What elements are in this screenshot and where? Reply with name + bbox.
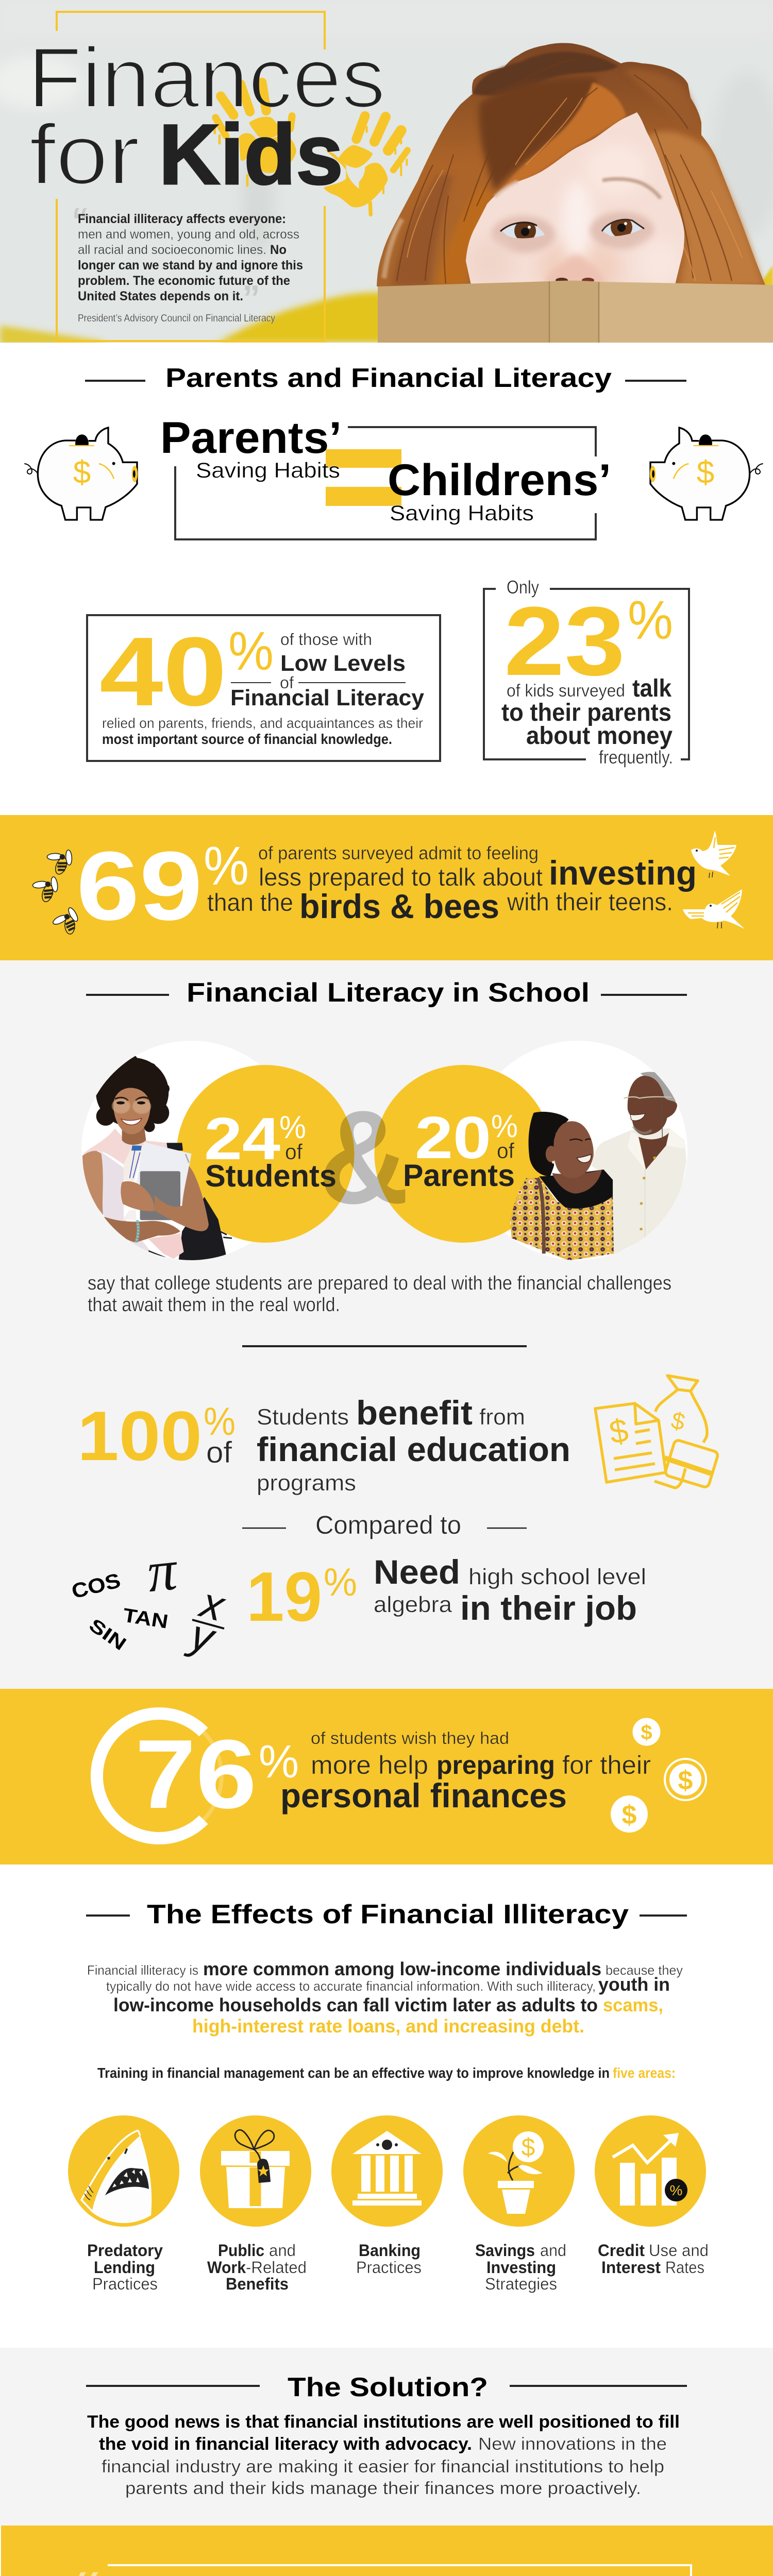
- stat: 69 percent: %: [204, 836, 249, 896]
- yellow circle: parents: [374, 1065, 552, 1243]
- white circle left: [81, 1041, 301, 1260]
- hero photo background: [0, 0, 773, 345]
- open book: [378, 281, 773, 343]
- banner text: with their teens.: [507, 889, 673, 916]
- stat: 20 percent of parents: %: [491, 1109, 518, 1144]
- hero quote: “: [72, 200, 90, 241]
- stat box: 23 percent: Only: [507, 577, 539, 598]
- stat: 19 percent: Need: [374, 1553, 460, 1591]
- label: predatory lending practices: Predatory: [87, 2241, 163, 2260]
- banner text: of parents surveyed admit to feeling: [258, 842, 539, 863]
- icon: plant: [463, 2115, 575, 2227]
- label: credit use and interest rates: Use and: [649, 2241, 709, 2260]
- hero quote: No: [270, 243, 287, 257]
- stat: 20 percent of parents: [403, 1104, 518, 1193]
- stat: 24 percent of students: 24: [204, 1105, 280, 1172]
- girl nose: [545, 255, 606, 284]
- hero quote: problem. The economic future of the: [78, 274, 290, 288]
- banner text: for their: [562, 1751, 651, 1780]
- label: savings and investing strategies: [475, 2241, 566, 2293]
- photo: student: [81, 1055, 232, 1261]
- paragraph: high-interest rate loans, and increasing debt.: [192, 2015, 584, 2037]
- stat: 19 percent: 19: [246, 1557, 322, 1636]
- quote text: [63, 2575, 711, 2576]
- girl eyebrow: [602, 179, 661, 198]
- icon: bees: [30, 846, 82, 939]
- girl right eye: [601, 218, 645, 236]
- stat: 76 percent: 76: [135, 1720, 257, 1829]
- caption: [88, 1273, 671, 1316]
- stat: 69 percent: 69: [76, 832, 203, 941]
- banner text: of students wish they had: [311, 1728, 509, 1748]
- paragraph: typically do not have wide access to accurate financial information. With such illiteracy,: [106, 1978, 596, 1994]
- title: for: [29, 107, 140, 202]
- saving habits equation: Childrens’: [388, 455, 611, 505]
- stat box: 23 percent: [484, 577, 689, 768]
- stat: 100 percent: financial education: [257, 1430, 570, 1468]
- hero quote: [72, 200, 303, 324]
- banner text: birds & bees: [299, 887, 499, 925]
- label: credit use and interest rates: Rates: [665, 2258, 704, 2277]
- stat: 76 percent: [135, 1720, 299, 1829]
- stat: 100 percent: from: [479, 1404, 525, 1430]
- icon: money bag, bill and cards: $: [607, 1411, 631, 1451]
- stat: 76 percent: %: [259, 1736, 299, 1788]
- stat: 19 percent: algebra: [374, 1592, 452, 1617]
- label: predatory lending practices: [87, 2241, 163, 2293]
- stat box: 40 percent: of: [280, 673, 294, 692]
- panel: parents and financial literacy: [24, 363, 763, 768]
- heading: The Effects of Financial Illiteracy: [147, 1900, 629, 1929]
- paragraph: low-income households can fall victim later as adults to: [113, 1994, 598, 2015]
- label: credit use and interest rates: [598, 2241, 709, 2277]
- white circle right: [468, 1041, 687, 1260]
- panel: 76 percent banner: [0, 1689, 773, 1865]
- saving habits equation: [160, 413, 611, 539]
- ring: [97, 1714, 222, 1838]
- heading: The Solution?: [288, 2372, 488, 2402]
- stat: 20 percent of parents: of: [497, 1139, 514, 1163]
- stat: 19 percent: [246, 1553, 646, 1636]
- stat: 19 percent: %: [324, 1561, 357, 1604]
- banner text: than the: [207, 889, 293, 917]
- quote attribution: President’s Advisory Council on Financial Literacy: [78, 313, 275, 324]
- saving habits equation: Saving Habits: [390, 501, 534, 525]
- banner text: preparing: [436, 1751, 555, 1780]
- paragraph: The good news is that financial institutions are well positioned to fill: [87, 2412, 680, 2432]
- label: public and work-related benefits: and: [269, 2241, 296, 2260]
- stat box: 40 percent: most important source of financial knowledge.: [102, 731, 392, 747]
- stat box: 23 percent: about money: [526, 722, 673, 750]
- title: Kids: [159, 107, 343, 202]
- banner text: personal finances: [280, 1776, 567, 1815]
- label: predatory lending practices: Practices: [92, 2275, 158, 2293]
- label: public and work-related benefits: -Related: [246, 2258, 307, 2277]
- icon: math symbols: TAN: [122, 1604, 170, 1633]
- caption: that await them in the real world.: [88, 1294, 340, 1316]
- heading: Financial Literacy in School: [187, 978, 590, 1008]
- icon: coins: $: [641, 1721, 652, 1744]
- label: public and work-related benefits: Benefits: [226, 2275, 289, 2293]
- icon: math symbols: [70, 1538, 231, 1663]
- stat box: 23 percent: to their parents: [501, 699, 671, 726]
- stat: 24 percent of students: [204, 1105, 337, 1193]
- label: savings and investing strategies: Investing: [486, 2258, 556, 2277]
- icon: shark: [68, 2115, 179, 2227]
- subheading: Training in financial management can be an effective way to improve knowledge in: [97, 2065, 610, 2081]
- girl hair: [377, 43, 766, 286]
- icon: money bag, bill and cards: [595, 1376, 719, 1488]
- stat: 20 percent of parents: Parents: [403, 1158, 515, 1193]
- stat: 20 percent of parents: 20: [415, 1104, 491, 1171]
- icon: bank: [331, 2115, 443, 2227]
- icon: math symbols: x: [194, 1578, 231, 1631]
- heading: Parents and Financial Literacy: [165, 363, 612, 393]
- stat: 19 percent: in their job: [460, 1589, 637, 1627]
- banner text: less prepared to talk about: [259, 864, 543, 891]
- icon: money bag, bill and cards: $: [669, 1406, 687, 1435]
- stat box: 40 percent: [87, 615, 440, 761]
- icon: coins: [611, 1718, 706, 1833]
- panel: the effects of financial illiteracy: [68, 1900, 709, 2293]
- yellow handprint right: [324, 116, 408, 215]
- yellow handprint left: [215, 82, 296, 185]
- label: savings and investing strategies: Strategies: [485, 2275, 557, 2293]
- compared to: Compared to: [315, 1511, 461, 1539]
- panel: 69 percent banner: [0, 815, 773, 960]
- label: banking practices: [356, 2241, 422, 2277]
- label: credit use and interest rates: Interest: [601, 2258, 661, 2277]
- hero quote: ”: [242, 278, 260, 318]
- stat: 100 percent: [77, 1394, 570, 1496]
- yellow circle: students: [176, 1065, 355, 1243]
- panel: the solution: [0, 2348, 773, 2526]
- icon: coins: $: [678, 1766, 693, 1795]
- stat box: 23 percent: talk: [632, 675, 671, 702]
- banner text: investing: [549, 854, 697, 892]
- label: savings and investing strategies: and: [540, 2241, 566, 2260]
- stat: 24 percent of students: %: [279, 1110, 306, 1145]
- girl face: [466, 112, 684, 299]
- stat: 24 percent of students: of: [285, 1140, 303, 1164]
- icon: math symbols: π: [144, 1538, 181, 1604]
- paragraph: New innovations in the: [478, 2434, 667, 2454]
- stat: 69 percent: [76, 832, 249, 941]
- label: savings and investing strategies: Savings: [475, 2241, 535, 2260]
- hero quote: Financial illiteracy affects everyone:: [78, 212, 286, 226]
- stat: 100 percent: Students: [257, 1404, 349, 1430]
- icon: credit chart: [595, 2115, 706, 2227]
- paragraph: [87, 1958, 683, 2037]
- stat box: 40 percent: Low Levels: [280, 651, 406, 676]
- label: banking practices: Practices: [356, 2258, 422, 2277]
- title: Finances: [28, 30, 385, 126]
- stat: 100 percent: %: [204, 1400, 236, 1444]
- title: [28, 30, 385, 202]
- banner text: more help: [311, 1751, 428, 1780]
- paragraph: more common among low-income individuals: [203, 1958, 601, 1979]
- stat box: 23 percent: 23: [504, 587, 625, 696]
- hero quote: all racial and socioeconomic lines.: [78, 243, 266, 257]
- icon: credit chart: %: [670, 2182, 682, 2198]
- icon: math symbols: COS: [70, 1569, 123, 1603]
- stat: 100 percent: benefit: [356, 1394, 473, 1432]
- yellow frame: [57, 12, 325, 341]
- icon: piggy bank left: $: [73, 455, 91, 490]
- hero quote: United States depends on it.: [78, 289, 243, 303]
- stat box: 23 percent: of kids surveyed: [507, 681, 625, 701]
- paragraph: scams,: [603, 1994, 663, 2015]
- saving habits equation: Saving Habits: [196, 458, 340, 482]
- stat box: 40 percent: relied on parents, friends, and acquaintances as their: [102, 715, 423, 731]
- stat box: 23 percent: frequently.: [599, 747, 673, 768]
- icon: plant: $: [522, 2134, 535, 2161]
- icon: piggy bank right: [650, 428, 763, 520]
- banner text: [280, 1728, 651, 1815]
- hero quote: men and women, young and old, across: [78, 227, 299, 242]
- saving habits equation: Parents’: [160, 413, 342, 463]
- icon: piggy bank left: [24, 428, 138, 520]
- stat box: 40 percent: 40: [99, 617, 227, 726]
- equals sign: [326, 449, 401, 506]
- ampersand: &: [318, 1082, 409, 1231]
- subheading: five areas:: [613, 2065, 676, 2081]
- stat box: 23 percent: %: [628, 590, 673, 651]
- icon: gift: [200, 2115, 311, 2227]
- stat: 24 percent of students: Students: [205, 1159, 337, 1193]
- paragraph: [87, 2412, 680, 2498]
- stat box: 40 percent: %: [228, 621, 274, 682]
- label: public and work-related benefits: Public: [218, 2241, 264, 2260]
- caption: say that college students are prepared to deal with the financial challenges: [88, 1273, 671, 1294]
- icon: math symbols: y: [183, 1609, 222, 1663]
- paragraph: financial industry are making it easier for financial institutions to help: [102, 2457, 664, 2477]
- icon: birds: [683, 831, 745, 929]
- label: public and work-related benefits: [207, 2241, 307, 2293]
- stat box: 40 percent: Financial Literacy: [230, 685, 425, 710]
- photo: parents: [510, 1072, 686, 1261]
- icon: math symbols: SIN: [85, 1614, 130, 1654]
- icon: piggy bank right: $: [697, 455, 714, 490]
- paragraph: youth in: [598, 1974, 670, 1995]
- stat: 19 percent: high school level: [468, 1564, 646, 1589]
- panel: mission quote: [1, 2526, 773, 2576]
- icon: coins: $: [622, 1800, 637, 1830]
- paragraph: parents and their kids manage their finances more proactively.: [125, 2479, 641, 2498]
- stat: 100 percent: of: [206, 1436, 232, 1469]
- label: public and work-related benefits: Work: [207, 2258, 246, 2277]
- hero quote: longer can we stand by and ignore this: [78, 258, 303, 273]
- hero panel: [0, 0, 773, 345]
- stat: 100 percent: programs: [257, 1470, 356, 1496]
- girl left eye: [500, 222, 545, 238]
- label: banking practices: Banking: [359, 2241, 421, 2260]
- banner text: [207, 842, 697, 925]
- panel: financial literacy in school: [0, 960, 773, 1689]
- label: predatory lending practices: Lending: [94, 2258, 155, 2277]
- quote frame: [79, 2565, 691, 2576]
- stat box: 40 percent: of those with: [280, 630, 372, 649]
- paragraph: Financial illiteracy is: [87, 1962, 198, 1978]
- label: credit use and interest rates: Credit: [598, 2241, 645, 2260]
- stat: 100 percent: 100: [77, 1397, 202, 1475]
- paragraph: because they: [606, 1962, 683, 1978]
- paragraph: the void in financial literacy with advocacy.: [99, 2434, 472, 2454]
